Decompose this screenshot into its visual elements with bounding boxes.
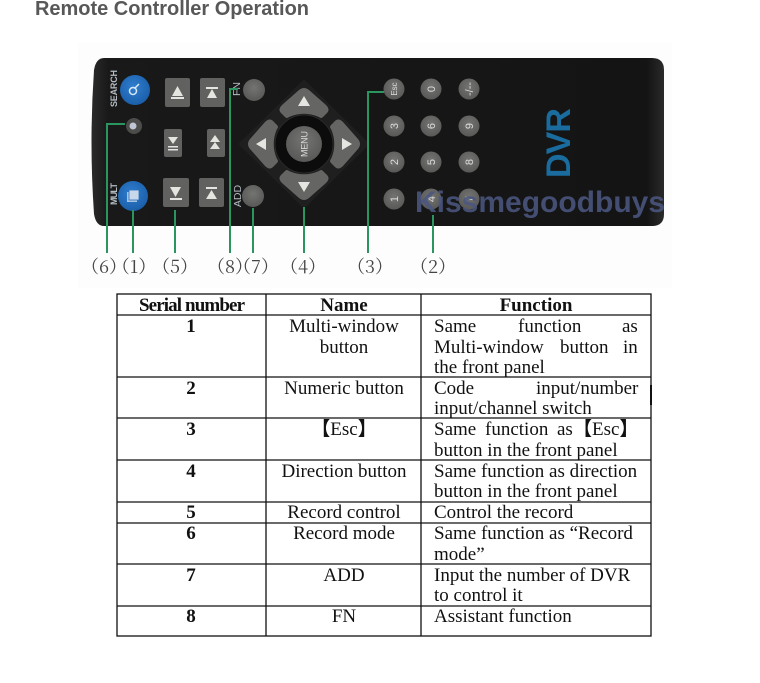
row 3: 3 <box>186 419 196 440</box>
callout numbers: （4） <box>280 253 326 279</box>
remote control photo <box>78 42 672 288</box>
search button <box>109 70 150 107</box>
row 1: button <box>320 337 369 358</box>
row 7: to control it <box>434 585 523 606</box>
numeric buttons: 0 <box>426 86 438 92</box>
row 2: input/channel switch <box>434 398 592 419</box>
callout numbers: （6） <box>81 253 127 279</box>
numeric buttons: 2 <box>389 159 401 165</box>
numeric buttons: 9 <box>464 123 476 129</box>
row 3: Esc】 <box>592 414 638 441</box>
row 6: mode” <box>434 544 485 565</box>
numeric buttons: 8 <box>464 159 476 165</box>
row 8: FN <box>332 606 356 627</box>
row 4: Same function as direction <box>434 461 638 482</box>
row 6: 6 <box>186 523 196 544</box>
callout numbers: （8） <box>207 253 253 279</box>
record control buttons <box>163 78 225 207</box>
row 4: 4 <box>186 461 196 482</box>
DVR logo: DVR <box>540 108 578 178</box>
row 6: Same function as “Record <box>434 523 633 544</box>
row 1: in <box>623 337 638 358</box>
table header: Function <box>500 295 573 316</box>
numeric buttons: Esc <box>390 82 399 96</box>
row 5 <box>186 502 574 523</box>
row 7: ADD <box>323 565 365 586</box>
row 2: 2 <box>186 378 196 399</box>
multi-window button <box>109 181 148 211</box>
row 1: Multi-window <box>289 316 399 337</box>
table header: Serial number <box>139 295 246 316</box>
numeric buttons: 5 <box>426 159 438 165</box>
row 1: function <box>518 316 582 337</box>
numeric buttons <box>384 78 480 210</box>
row 6: Record mode <box>293 523 395 544</box>
row 1: button <box>560 337 609 358</box>
row 3 <box>186 414 638 461</box>
row 1: 1 <box>186 316 196 337</box>
row 7: Input the number of DVR <box>434 565 631 586</box>
numeric buttons: -/-- <box>464 82 476 96</box>
row 7 <box>186 565 631 606</box>
row 1 <box>186 316 638 378</box>
direction pad <box>241 82 367 206</box>
row 8 <box>186 606 572 627</box>
remote body <box>92 58 664 226</box>
row 1: the front panel <box>434 357 545 378</box>
row 4: button in the front panel <box>434 481 618 502</box>
row 2: Code <box>434 378 474 399</box>
row 3: 【Esc】 <box>311 414 377 441</box>
row 8: 8 <box>186 606 196 627</box>
callout numbers: （2） <box>410 253 456 279</box>
row 7: 7 <box>186 565 196 586</box>
table header: Name <box>320 295 368 316</box>
FN button <box>231 79 265 101</box>
row 3: as <box>557 419 573 440</box>
row 3: button in the front panel <box>434 440 618 461</box>
row 1: Same <box>434 316 476 337</box>
ADD button <box>232 184 264 207</box>
numeric buttons: 1 <box>389 196 401 202</box>
row 3: Same <box>434 419 476 440</box>
row 3: 【 <box>573 414 592 441</box>
direction pad: MENU <box>300 131 310 157</box>
multi-window button: MULT <box>109 182 119 205</box>
FN button: FN <box>231 82 243 96</box>
row 6 <box>186 523 633 565</box>
row 3: function <box>485 419 549 440</box>
record mode LED button <box>126 118 142 134</box>
row 8: Assistant function <box>434 606 572 627</box>
row 4 <box>186 461 638 502</box>
function table <box>117 294 651 636</box>
row 2: Numeric button <box>284 378 404 399</box>
row 2: input/number <box>536 378 639 399</box>
row 1: Multi-window <box>434 337 544 358</box>
numeric buttons: 6 <box>426 123 438 129</box>
row 1: as <box>622 316 638 337</box>
callout numbers: （7） <box>233 253 279 279</box>
row 4: Direction button <box>281 461 407 482</box>
row 2 <box>186 378 639 419</box>
search button: SEARCH <box>109 70 119 107</box>
callout numbers: （3） <box>347 253 393 279</box>
callout lines <box>107 89 433 253</box>
row 5: Record control <box>287 502 401 523</box>
watermark: Kissmegoodbuys <box>415 186 665 219</box>
numeric buttons: 7 <box>464 196 476 202</box>
numeric buttons: 4 <box>426 196 438 202</box>
callout numbers: （1） <box>112 253 156 279</box>
numeric buttons: 3 <box>389 123 401 129</box>
row 5: 5 <box>186 502 196 523</box>
row 5: Control the record <box>434 502 574 523</box>
table header <box>139 295 573 316</box>
callout numbers: （5） <box>152 253 198 279</box>
ADD button: ADD <box>232 184 244 207</box>
callout numbers <box>81 253 456 279</box>
table grid <box>117 294 651 636</box>
